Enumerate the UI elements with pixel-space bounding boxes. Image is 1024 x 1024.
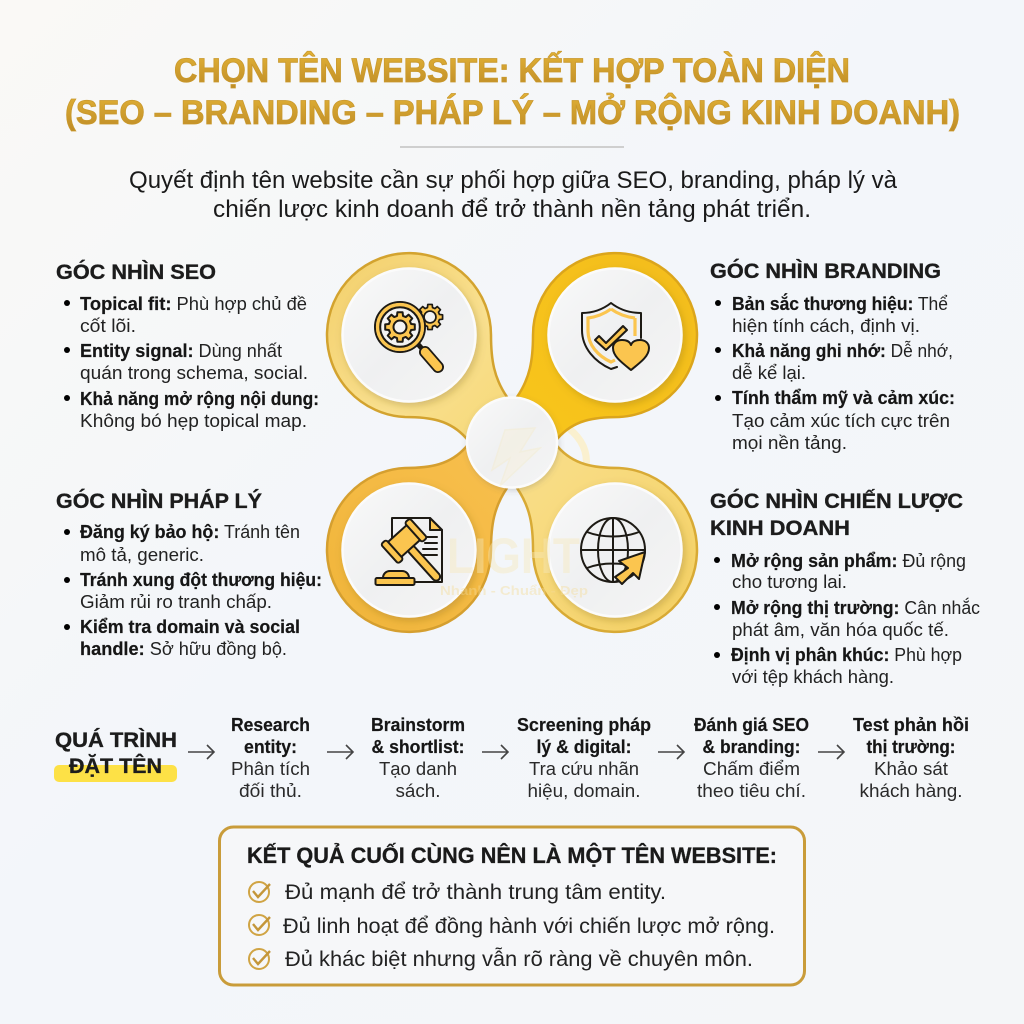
icon: gavel and document xyxy=(376,518,453,593)
watermark: LIGHT logo: Nhanh - Chuẩn - Đẹp xyxy=(440,583,588,598)
panel: branding perspective text: hiện tính cách, định vị. xyxy=(732,316,920,336)
panel: SEO perspective text: Không bó hẹp topical map. xyxy=(80,411,307,431)
step 1: research entity: Phân tích xyxy=(231,759,310,779)
step 5: market test: thị trường: xyxy=(866,737,956,757)
arrow 4 xyxy=(658,745,684,759)
watermark: LIGHT logo: LIGHT xyxy=(447,528,580,584)
step 3: screening xyxy=(517,715,651,801)
panel: business strategy perspective text: phát âm, văn hóa quốc tế. xyxy=(732,620,949,640)
step 5: market test: Test phản hồi xyxy=(853,715,969,735)
panel: legal perspective text xyxy=(56,489,322,659)
step 4: evaluation: & branding: xyxy=(702,737,800,757)
result item 2: Đủ linh hoạt để đồng hành với chiến lược mở rộng. xyxy=(283,914,775,938)
panel: SEO perspective text xyxy=(56,260,319,431)
panel: legal perspective text: Kiểm tra domain và social xyxy=(80,617,300,637)
watermark ring behind diagram xyxy=(438,424,586,518)
step 1: research entity xyxy=(231,715,310,801)
panel: final result xyxy=(220,827,804,985)
panel: legal perspective text: GÓC NHÌN PHÁP LÝ xyxy=(56,489,262,513)
arrow 1 xyxy=(188,745,214,759)
subtitle: chiến lược kinh doanh để trở thành nền tảng phát triển. xyxy=(213,196,811,223)
step 3: screening: Tra cứu nhãn xyxy=(529,759,639,779)
petal: bottom right xyxy=(517,447,697,632)
step 1: research entity: entity: xyxy=(244,737,297,757)
step 2: brainstorm: sách. xyxy=(396,781,440,801)
step 4: evaluation: theo tiêu chí. xyxy=(697,781,806,801)
step 2: brainstorm xyxy=(371,715,465,801)
panel: branding perspective text: Khả năng ghi nhớ: Dễ nhớ, xyxy=(732,340,953,361)
step 4: evaluation: Chấm điểm xyxy=(703,759,800,779)
panel: SEO perspective text: Entity signal: Dùng nhất xyxy=(80,341,282,361)
arrow 2 xyxy=(327,745,353,759)
panel: business strategy perspective text: KINH DOANH xyxy=(710,517,850,540)
step 2: brainstorm: Tạo danh xyxy=(379,759,457,779)
panel: branding perspective text xyxy=(710,259,955,453)
step 3: screening: lý & digital: xyxy=(536,737,632,757)
icon: shield with check and heart xyxy=(582,303,649,370)
panel: business strategy perspective text: Mở rộng thị trường: Cân nhắc xyxy=(731,597,980,618)
heading: naming process xyxy=(54,729,177,782)
panel: branding perspective text: Bản sắc thương hiệu: Thể xyxy=(732,293,948,314)
step 5: market test xyxy=(853,715,969,801)
step 3: screening: Screening pháp xyxy=(517,715,651,735)
icon: globe with arrow xyxy=(581,518,645,584)
title: CHỌN TÊN WEBSITE: KẾT HỢP TOÀN DIỆN xyxy=(174,52,850,90)
icon: magnifier with gears xyxy=(375,302,443,367)
step 5: market test: khách hàng. xyxy=(860,781,962,801)
heading: naming process: QUÁ TRÌNH xyxy=(55,729,177,752)
step 5: market test: Khảo sát xyxy=(874,759,948,779)
panel: SEO perspective text: GÓC NHÌN SEO xyxy=(56,260,216,284)
petal: bottom left xyxy=(327,447,507,632)
step 3: screening: hiệu, domain. xyxy=(528,781,640,801)
title: (SEO – BRANDING – PHÁP LÝ – MỞ RỘNG KINH DOANH) xyxy=(65,93,960,132)
result heading: KẾT QUẢ CUỐI CÙNG NÊN LÀ MỘT TÊN WEBSITE: xyxy=(247,842,777,868)
step 1: research entity: Research xyxy=(231,715,310,735)
subtitle: Quyết định tên website cần sự phối hợp giữa SEO, branding, pháp lý và xyxy=(129,167,898,194)
panel: branding perspective text: GÓC NHÌN BRANDING xyxy=(710,259,941,283)
panel: SEO perspective text: Topical fit: Phù hợp chủ đề xyxy=(80,294,307,314)
disc: top left xyxy=(342,268,476,402)
disc: bottom left xyxy=(342,484,476,616)
result item 3: Đủ khác biệt nhưng vẫn rõ ràng về chuyên môn. xyxy=(285,946,753,971)
panel: legal perspective text: mô tả, generic. xyxy=(80,545,204,565)
panel: legal perspective text: Tránh xung đột thương hiệu: xyxy=(80,570,322,590)
result item 1: Đủ mạnh để trở thành trung tâm entity. xyxy=(285,880,666,904)
step 4: evaluation: Đánh giá SEO xyxy=(694,715,809,735)
panel: business strategy perspective text: GÓC NHÌN CHIẾN LƯỢC xyxy=(710,489,963,513)
panel: SEO perspective text: quán trong schema, social. xyxy=(80,363,308,383)
panel: business strategy perspective text: Mở rộng sản phẩm: Đủ rộng xyxy=(731,551,966,571)
title xyxy=(65,52,960,132)
watermark: LIGHT logo xyxy=(440,428,588,598)
panel: legal perspective text: handle: Sở hữu đồng bộ. xyxy=(80,639,287,659)
panel: legal perspective text: Giảm rủi ro tranh chấp. xyxy=(80,592,272,612)
panel: branding perspective text: dễ kể lại. xyxy=(732,362,806,383)
petal: top left xyxy=(327,253,507,438)
step 2: brainstorm: & shortlist: xyxy=(372,737,464,757)
panel: legal perspective text: Đăng ký bảo hộ: Tránh tên xyxy=(80,522,300,542)
disc: centre xyxy=(467,398,557,488)
arrow 3 xyxy=(482,745,508,759)
panel: branding perspective text: Tính thẩm mỹ và cảm xúc: xyxy=(732,388,955,408)
panel: branding perspective text: mọi nền tảng. xyxy=(732,433,847,453)
panel: SEO perspective text: Khả năng mở rộng nội dung: xyxy=(80,389,319,409)
panel: business strategy perspective text xyxy=(710,489,980,687)
heading: naming process: ĐẶT TÊN xyxy=(69,754,162,778)
panel: SEO perspective text: cốt lõi. xyxy=(80,316,136,336)
step 4: evaluation xyxy=(694,715,809,801)
diagram: four petals xyxy=(327,253,697,632)
disc: top right xyxy=(548,268,682,402)
disc: bottom right xyxy=(548,484,682,616)
panel: business strategy perspective text: cho tương lai. xyxy=(732,572,847,592)
step 1: research entity: đối thủ. xyxy=(239,781,302,801)
petal: top right xyxy=(517,253,697,438)
step 2: brainstorm: Brainstorm xyxy=(371,715,465,735)
panel: branding perspective text: Tạo cảm xúc tích cực trên xyxy=(732,411,950,431)
subtitle xyxy=(129,167,898,223)
panel: business strategy perspective text: Định vị phân khúc: Phù hợp xyxy=(731,645,962,665)
arrow 5 xyxy=(818,745,844,759)
panel: business strategy perspective text: với tệp khách hàng. xyxy=(732,667,894,687)
